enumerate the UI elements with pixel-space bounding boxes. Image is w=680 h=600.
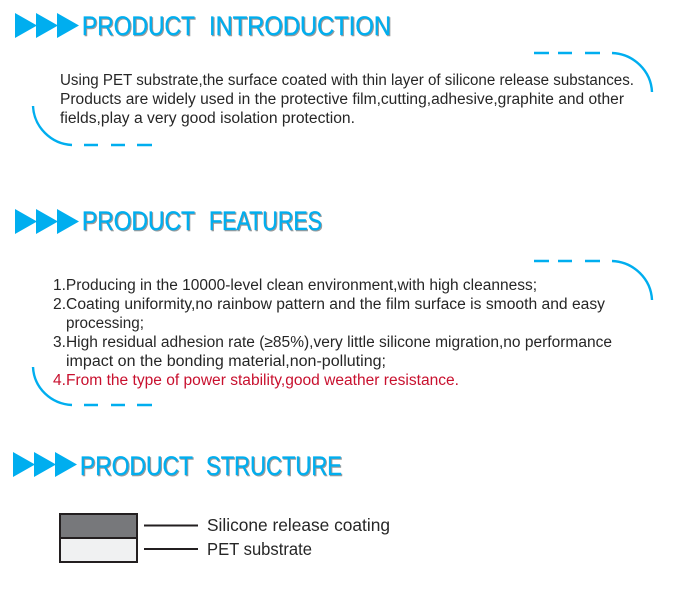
text block: features list: 1.Producing in the 10000-level clean environment,with high cleanness; <box>53 277 537 294</box>
heading: product structure <box>13 451 343 482</box>
layer: PET substrate <box>60 538 137 562</box>
heading: product structure: STRUCTURE <box>207 452 343 482</box>
text block: features list: 3.High residual adhesion rate (≥85%),very little silicone migration,no performance <box>53 334 612 351</box>
icon: triple arrows features <box>15 209 79 234</box>
label: substrate: PET substrate <box>207 539 312 559</box>
icon: triple arrows introduction <box>15 13 79 38</box>
heading: product introduction: INTRODUCTION <box>210 12 392 42</box>
text block: introduction <box>60 72 634 127</box>
leader line: substrate <box>144 548 198 550</box>
heading: product introduction: PRODUCT <box>82 11 195 41</box>
heading: product features <box>15 206 323 237</box>
text block: introduction: fields,play a very good isolation protection. <box>60 110 355 127</box>
heading: product introduction <box>15 11 392 42</box>
heading: product features: PRODUCT <box>82 206 195 236</box>
heading: product introduction: INTRODUCTION <box>209 11 391 41</box>
heading: product structure: PRODUCT <box>80 451 193 481</box>
leader line: coating <box>144 524 198 526</box>
layer: silicone release coating <box>60 514 137 538</box>
heading: product structure: STRUCTURE <box>206 451 342 481</box>
text block: features list: 4.From the type of power stability,good weather resistance. <box>53 372 459 389</box>
heading: product features: FEATURES <box>209 206 322 236</box>
decorative bracket: features top right <box>534 261 652 300</box>
text block: features list: 2.Coating uniformity,no rainbow pattern and the film surface is smooth and easy <box>53 296 605 313</box>
text block: features list: impact on the bonding material,non-polluting; <box>66 353 386 370</box>
text block: features list <box>53 277 612 389</box>
heading: product introduction: PRODUCT <box>83 12 196 42</box>
decorative bracket: introduction top right <box>534 53 652 92</box>
heading: product features: PRODUCT <box>83 207 196 237</box>
text block: introduction: Using PET substrate,the surface coated with thin layer of silicone release substances. <box>60 72 634 89</box>
diagram: layer structure <box>60 514 390 562</box>
decorative bracket: features bottom left <box>33 367 152 405</box>
text block: introduction: Products are widely used in the protective film,cutting,adhesive,graphite and other <box>60 91 624 108</box>
icon: triple arrows structure <box>13 452 77 477</box>
heading: product structure: PRODUCT <box>81 452 194 482</box>
text block: features list: processing; <box>66 315 144 332</box>
label: coating: Silicone release coating <box>207 515 390 535</box>
heading: product features: FEATURES <box>210 207 323 237</box>
decorative bracket: introduction bottom left <box>33 106 152 145</box>
